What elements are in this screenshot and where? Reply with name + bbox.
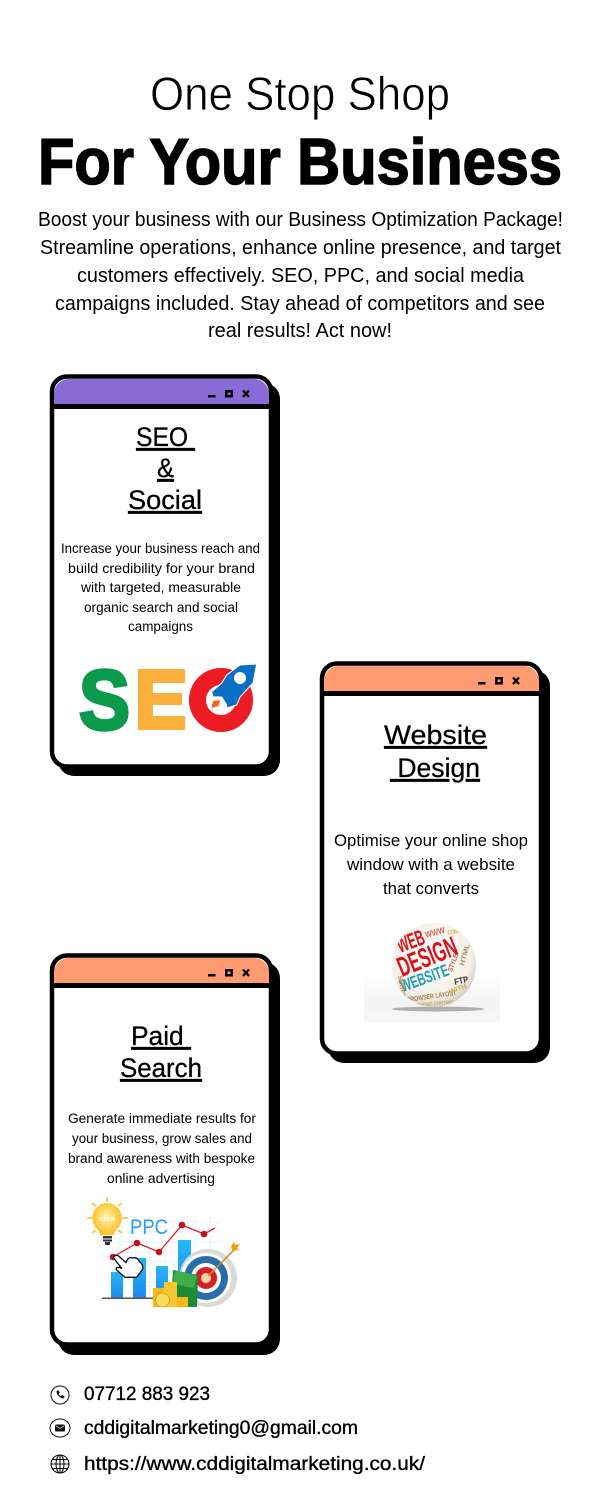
title: One Stop Shop: One Stop Shop [150,67,450,120]
icon: web design word globe: DESIGN [393,931,462,983]
icon: web design word globe: BROWSER LAYOUT [406,990,457,1004]
heading: SEO & Social: SEO [136,422,195,452]
icon: SEO logo with rocket: S [79,653,130,747]
text: SEO description: organic search and social [84,600,238,615]
heading: Paid Search [120,1021,202,1083]
heading: Website Design: Design [390,753,480,783]
text: paid search description: your business, grow sales and [72,1131,252,1146]
icon: web design word globe: WEBSITE [398,961,451,996]
heading: SEO & Social [128,422,202,515]
intro text block: Boost your business with our Business Optimization Package! [38,209,563,231]
text: SEO description: build credibility for your brand [68,561,255,576]
text: SEO description: campaigns [128,619,193,634]
chart: PPC illustration: PPC [130,1216,168,1239]
icon: phone [51,1386,69,1404]
heading: Paid Search: Search [120,1053,202,1083]
heading: Paid Search: Paid [131,1021,191,1051]
text: website description: Optimise your online shop [334,831,528,850]
icon: web design word globe: CONTENT [447,927,468,937]
icon: web design word globe: GRAPHIC CONTENT [414,1000,454,1009]
panel: Paid Search [52,956,280,1355]
heading: Website Design [384,720,487,783]
heading: SEO & Social: Social [128,485,202,515]
text: website description: that converts [383,879,479,898]
contact: email: cddigitalmarketing0@gmail.com [84,1418,358,1439]
text: SEO description [61,541,260,634]
text: paid search description: Generate immediate results for [68,1111,256,1126]
text: SEO description: Increase your business reach and [61,541,260,556]
intro text block: campaigns included. Stay ahead of competitors and see [55,293,545,315]
icon: envelope [50,1419,70,1437]
panel: SEO & Social [52,376,280,776]
intro text block: Streamline operations, enhance online presence, and target [40,237,561,259]
intro text block [38,209,563,342]
icon: web design word globe: SERVER [396,975,406,999]
text: paid search description: brand awareness with bespoke [68,1151,255,1166]
chart: PPC illustration [87,1197,240,1307]
icon: web design word globe: STYLE [447,953,460,973]
icon: web design word globe [364,923,500,1023]
intro text block: real results! Act now! [208,320,392,342]
intro text block: customers effectively. SEO, PPC, and social media [77,265,525,287]
panel: Website Design [322,664,550,1063]
icon: web design word globe: WWW [424,925,446,940]
text: website description [334,831,528,898]
icon: web design word globe: WEB [393,925,428,958]
icon: globe [51,1455,69,1473]
text: website description: window with a website [346,855,515,874]
text: paid search description [68,1111,256,1186]
contact: website: https://www.cddigitalmarketing.co.uk/ [84,1454,426,1475]
heading: For Your Business: For Your Business [38,125,562,198]
heading: Website Design: Website [384,720,487,750]
heading: SEO & Social: & [157,453,174,483]
text: paid search description: online advertising [107,1171,215,1186]
icon: web design word globe: WITH [448,983,468,996]
chart: PPC illustration: idea [99,1216,115,1223]
icon: web design word globe: HTML [459,943,472,967]
icon: web design word globe: FTP [453,974,469,987]
icon: SEO logo with rocket [79,653,257,747]
text: SEO description: with targeted, measurable [80,580,241,595]
contact: phone: 07712 883 923 [84,1384,210,1405]
